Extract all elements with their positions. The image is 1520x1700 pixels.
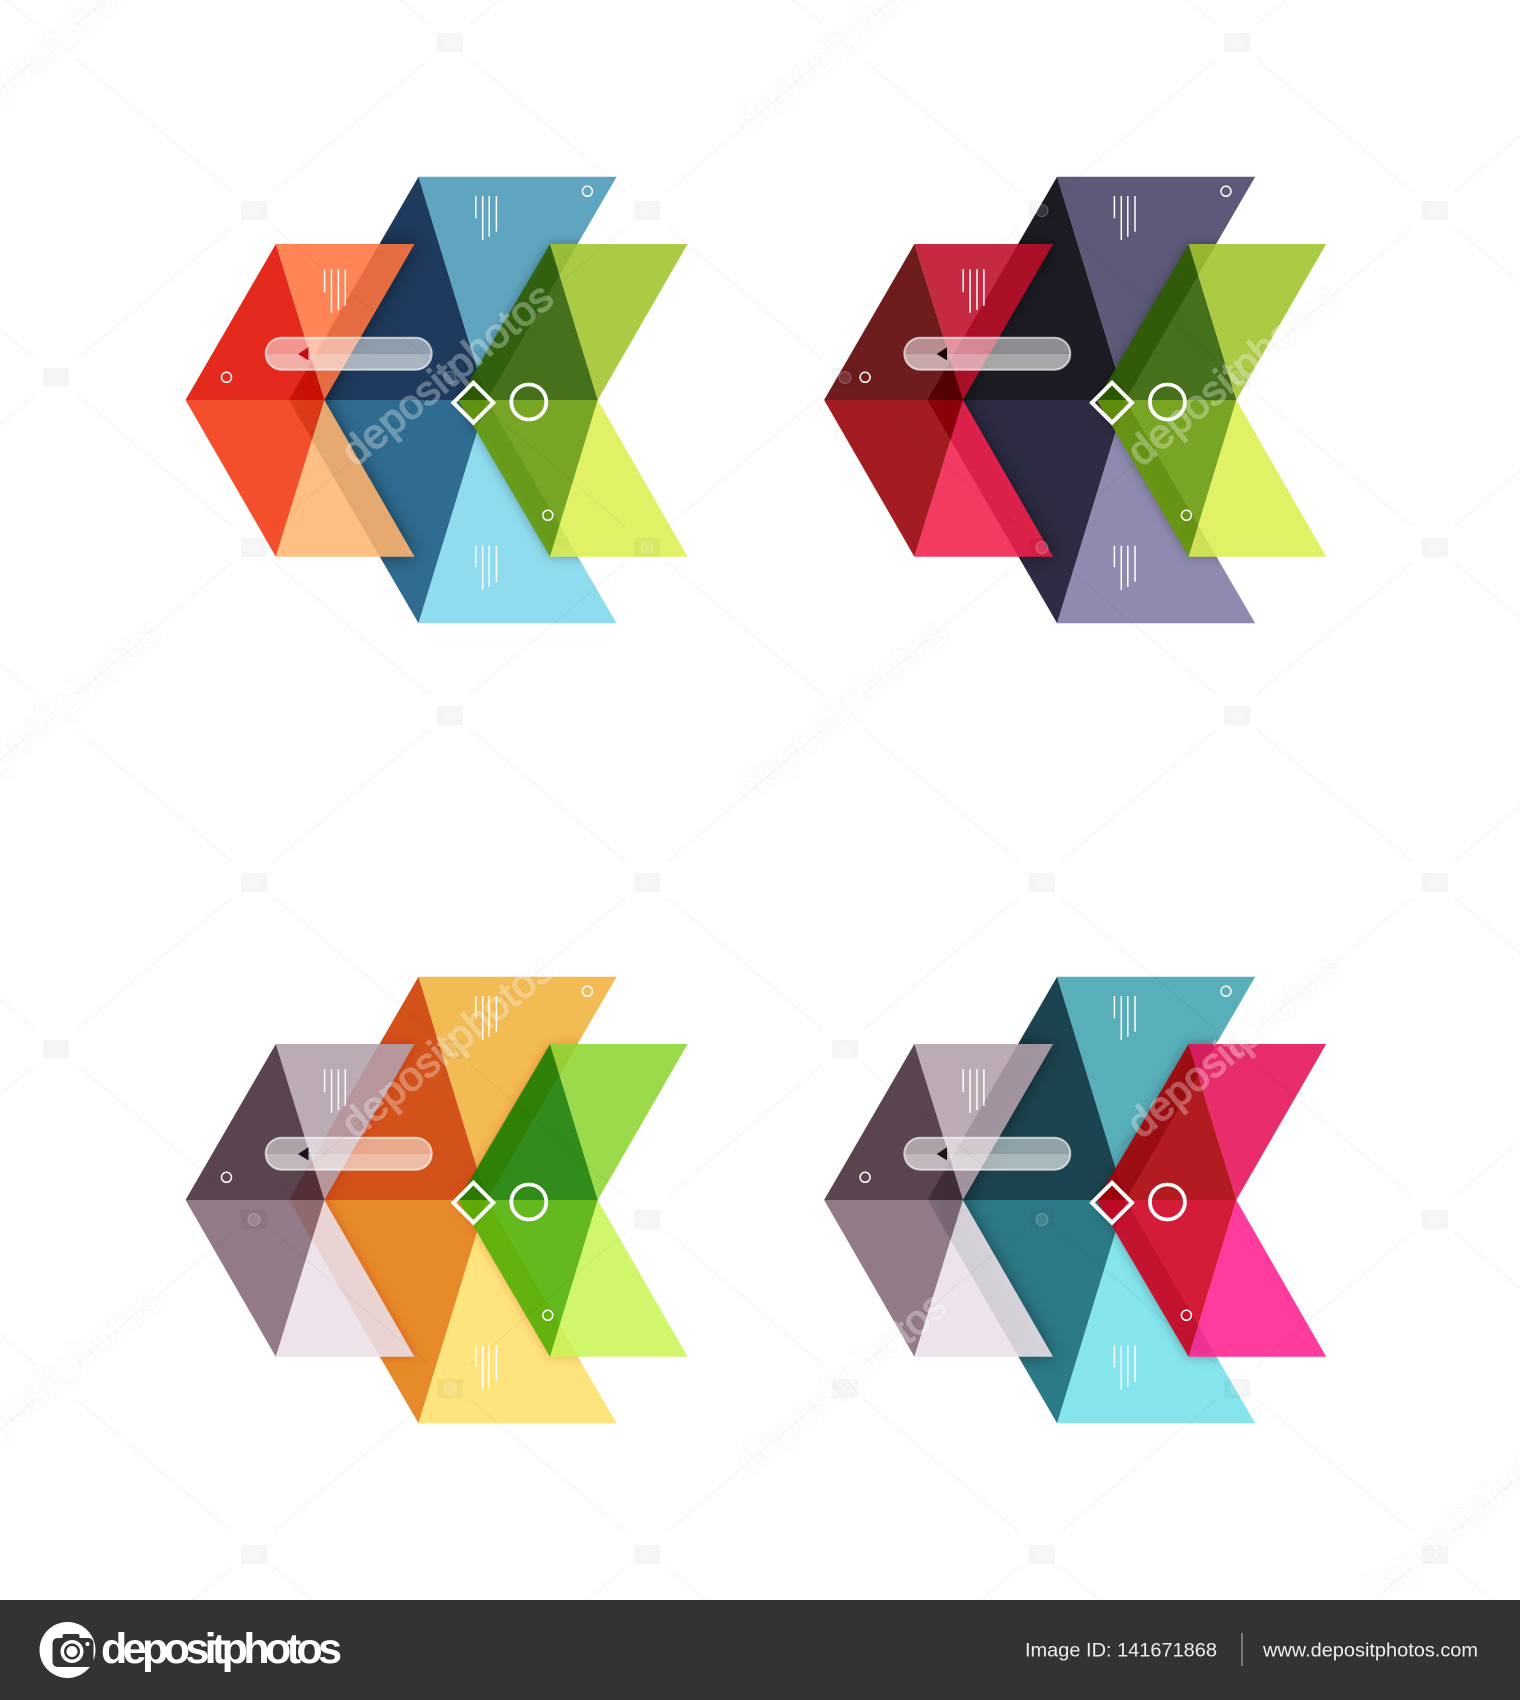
left arrow: grey mauve — [186, 1044, 414, 1357]
left arrow: crimson — [824, 244, 1053, 557]
left arrow: red orange — [186, 244, 414, 557]
pill label — [904, 338, 1070, 370]
tally lines — [963, 996, 1135, 1390]
watermark text: depositphotos — [726, 1282, 956, 1483]
watermark text: depositphotos — [726, 609, 956, 810]
tally lines — [325, 996, 496, 1390]
pill label — [266, 338, 432, 370]
watermark text: depositphotos — [1118, 273, 1348, 474]
tally lines — [325, 196, 496, 590]
divider — [1242, 1633, 1243, 1666]
diamond and circle markers — [860, 186, 1231, 520]
middle arrow: orange — [289, 977, 617, 1423]
watermark text: depositphotos — [332, 945, 562, 1146]
pill label — [904, 1138, 1070, 1170]
image id: Image ID: 141671868 — [1025, 1640, 1217, 1662]
left arrow: grey mauve — [824, 1044, 1053, 1357]
arrow set: bottom left (grey, orange, green) — [186, 977, 688, 1423]
tally lines — [963, 196, 1135, 590]
arrow set: top right (navy, crimson, green) — [824, 177, 1326, 623]
footer bar — [0, 1600, 1520, 1700]
middle arrow: teal — [927, 977, 1255, 1423]
diamond and circle markers — [222, 986, 592, 1320]
right arrow: red magenta — [1097, 1044, 1326, 1357]
right arrow: green — [458, 244, 688, 557]
arrow set: top left (blue, red, green) — [186, 177, 688, 623]
right arrow: green — [1097, 244, 1326, 557]
watermark text: depositphotos — [332, 273, 562, 474]
icon: logo camera — [40, 1622, 96, 1678]
middle arrow: navy violet — [927, 177, 1255, 623]
middle arrow: blue — [289, 177, 617, 623]
diamond and circle markers — [222, 186, 592, 520]
watermark text: depositphotos — [1118, 945, 1348, 1146]
pill label — [266, 1138, 432, 1170]
logo wordmark: depositphotos — [101, 1625, 342, 1673]
website url: www.depositphotos.com — [1262, 1640, 1478, 1662]
arrow set: bottom right (grey, teal, magenta) — [824, 977, 1326, 1423]
right arrow: bright green — [458, 1044, 688, 1357]
diamond and circle markers — [860, 986, 1231, 1320]
